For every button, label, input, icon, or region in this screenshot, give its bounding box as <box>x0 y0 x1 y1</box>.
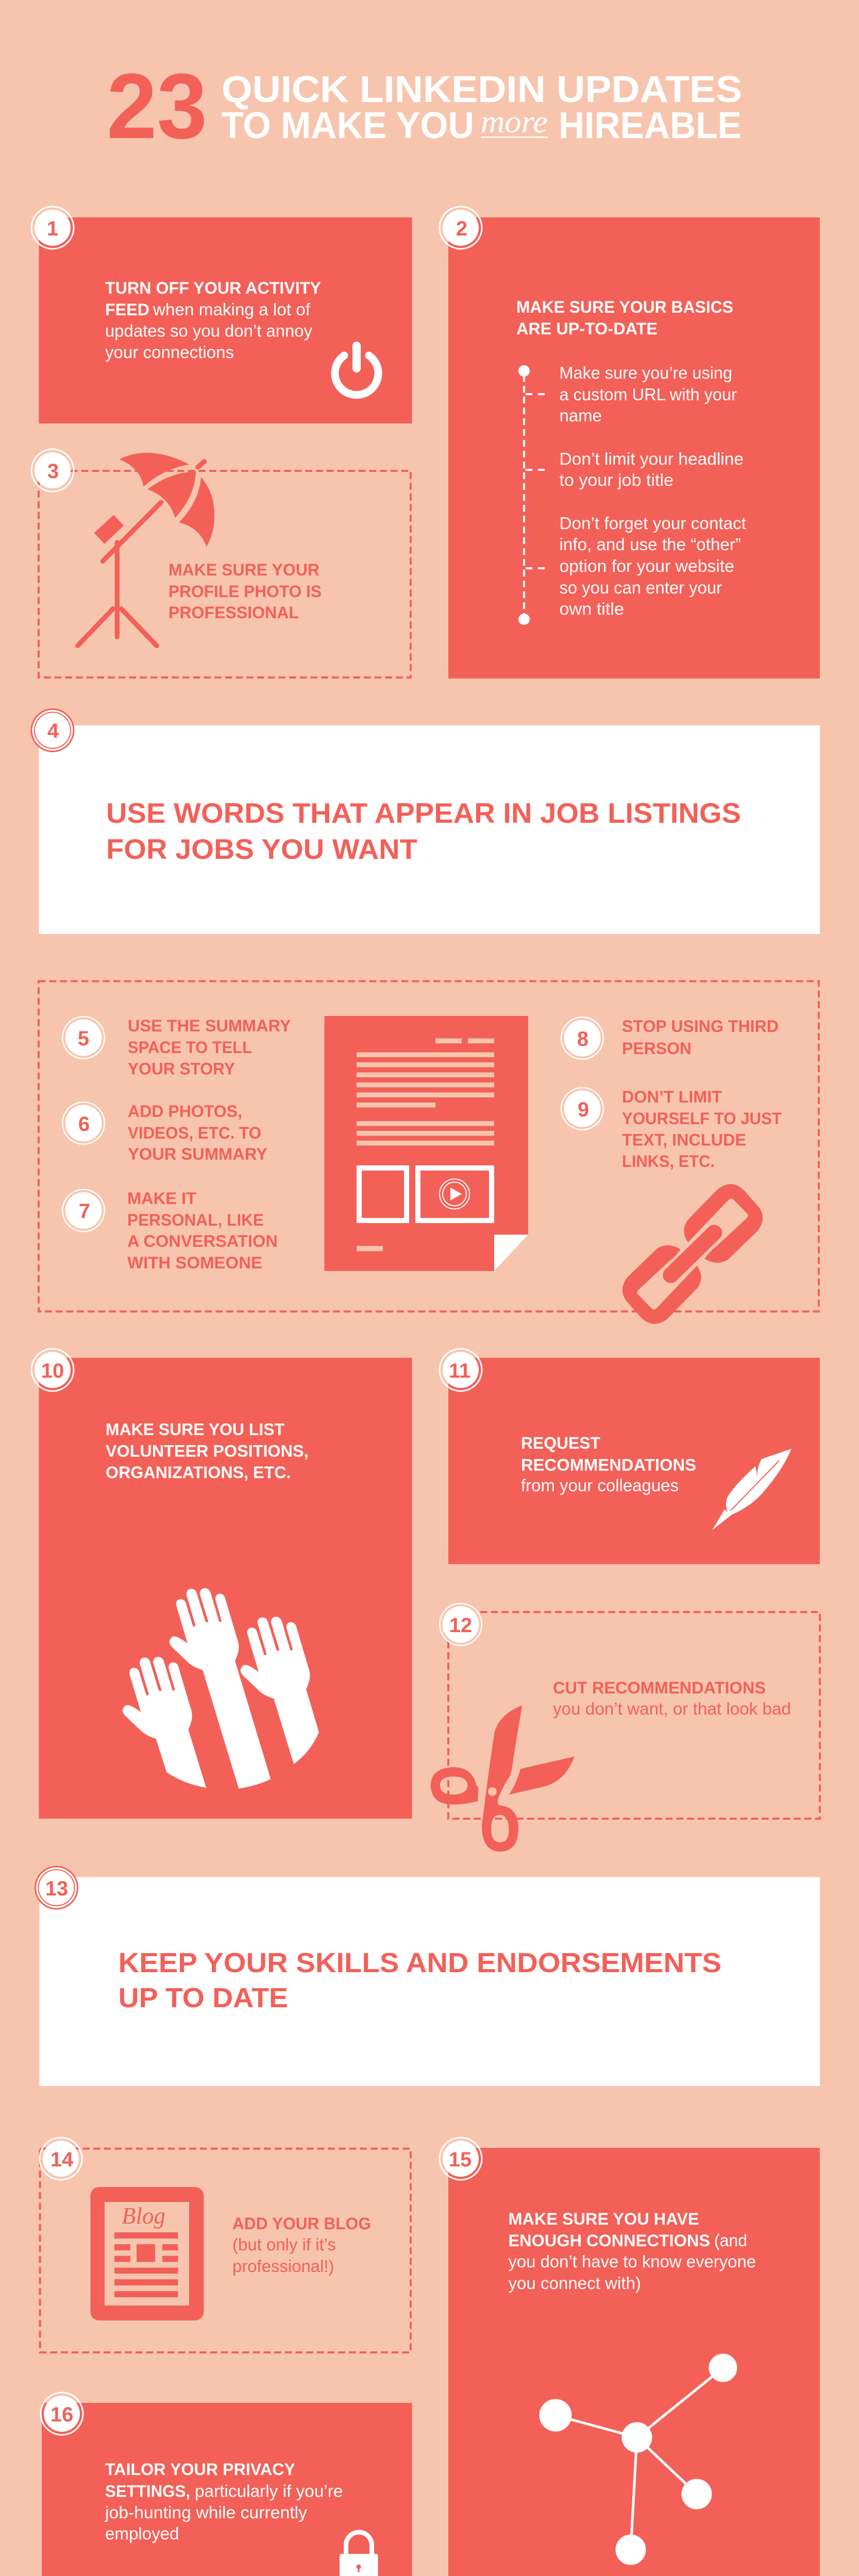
badge 2 <box>440 207 482 249</box>
panel: tip 4 words in job listings <box>39 725 820 934</box>
badge 1 <box>31 207 74 249</box>
tips 5-7 text: VIDEOS, ETC. TO <box>128 1124 261 1142</box>
tip 14 text: ADD YOUR BLOG <box>232 2214 371 2233</box>
title: TO MAKE YOU <box>222 105 474 146</box>
tip 15 text: MAKE SURE YOU HAVE <box>508 2210 699 2228</box>
icon: padlock <box>340 2532 378 2576</box>
tip 16 text: job-hunting while currently <box>105 2503 308 2522</box>
tip 11 text: from your colleagues <box>521 1476 679 1495</box>
tip 1 text: when making a lot of <box>153 300 311 319</box>
tip 2 list: to your job title <box>560 470 673 489</box>
panel: tip 10 volunteer <box>39 1358 412 1819</box>
tip 2 list: Make sure you’re using <box>560 363 732 382</box>
tip 15 text: you don’t have to know everyone <box>508 2252 756 2271</box>
tip 16 text: TAILOR YOUR PRIVACY <box>105 2460 295 2479</box>
badge 11 <box>440 1349 482 1391</box>
badge 5: 5 <box>78 1027 89 1050</box>
tip 10 text: VOLUNTEER POSITIONS, <box>106 1442 308 1461</box>
tip 14 text: professional!) <box>232 2257 334 2276</box>
tip 2 list: a custom URL with your <box>560 385 737 404</box>
tips 5-7 text: A CONVERSATION <box>127 1232 278 1250</box>
tip 3 text: PROFILE PHOTO IS <box>169 582 322 601</box>
tip 16 text: particularly if you’re <box>195 2482 343 2501</box>
badge 7 <box>62 1189 105 1232</box>
badge 5 <box>62 1016 105 1059</box>
icon: document <box>325 1016 528 1271</box>
tip 2 list: Don’t forget your contact <box>560 514 746 533</box>
tip 2 list: info, and use the “other” <box>560 535 741 554</box>
tip 4 text: FOR JOBS YOU WANT <box>106 833 417 865</box>
badge 9: 9 <box>578 1098 589 1121</box>
tip 14 text <box>232 2214 371 2276</box>
tips 8-9 text: STOP USING THIRD <box>622 1017 779 1036</box>
badge 14: 14 <box>50 2148 74 2171</box>
icon: raised hands <box>123 1588 319 1789</box>
tips 8-9 text: YOURSELF TO JUST <box>622 1109 782 1128</box>
tip 16 text <box>105 2460 343 2543</box>
tip 12 text <box>553 1679 791 1718</box>
panel: tip 16 privacy <box>42 2403 412 2576</box>
tip 3 text: MAKE SURE YOUR <box>169 561 319 579</box>
badge 1: 1 <box>47 217 58 240</box>
tip 14 text: (but only if it’s <box>232 2235 336 2254</box>
panel: tip 3 profile photo <box>39 453 411 677</box>
tip 13 text: KEEP YOUR SKILLS AND ENDORSEMENTS <box>119 1947 721 1978</box>
tips 5-7 text: USE THE SUMMARY <box>128 1016 291 1035</box>
tip 10 text: MAKE SURE YOU LIST <box>106 1420 284 1439</box>
tips 8-9 text <box>622 1017 782 1171</box>
tip 2 list: so you can enter your <box>560 578 722 597</box>
tips 8-9 text: PERSON <box>622 1039 692 1058</box>
panel: tip 12 cut recommendations <box>431 1612 820 1852</box>
badge 12: 12 <box>449 1614 472 1637</box>
badge 15 <box>440 2138 482 2180</box>
tips 8-9 text: TEXT, INCLUDE <box>622 1130 746 1149</box>
tip 2 list: name <box>560 406 602 425</box>
tip 12 text: you don’t want, or that look bad <box>553 1699 791 1718</box>
tip 1 text: updates so you don’t annoy <box>105 321 312 340</box>
tip 4 text <box>106 797 741 865</box>
tip 11 text: RECOMMENDATIONS <box>521 1456 696 1475</box>
tip 2 list: own title <box>560 599 624 618</box>
badge 10 <box>31 1349 74 1391</box>
badge 6: 6 <box>78 1113 90 1136</box>
tips 5-7 text: ADD PHOTOS, <box>128 1102 242 1121</box>
tip 13 text: UP TO DATE <box>119 1982 288 2013</box>
title: QUICK LINKEDIN UPDATES <box>222 69 742 110</box>
tip 1 text: FEED <box>105 300 149 319</box>
badge 4 <box>31 709 74 751</box>
panel: tip 13 skills <box>39 1877 820 2086</box>
tip 15 text: ENOUGH CONNECTIONS <box>508 2231 710 2250</box>
tip 2 list: Don’t limit your headline <box>560 449 744 468</box>
badge 13 <box>35 1867 77 1909</box>
tip 1 text: your connections <box>105 343 234 362</box>
badge 16: 16 <box>50 2403 73 2426</box>
tip 2 list: option for your website <box>560 556 734 575</box>
panel: tips 5-9 summary <box>39 981 819 1324</box>
tips 5-7 text: PERSONAL, LIKE <box>127 1211 264 1229</box>
panel: tip 14 blog <box>40 2148 411 2352</box>
tip 2 heading <box>516 298 733 338</box>
title <box>107 55 742 158</box>
badge 6 <box>62 1101 105 1145</box>
title: HIREABLE <box>559 105 742 146</box>
badge 4: 4 <box>47 720 59 742</box>
tip 16 text: SETTINGS, <box>105 2482 190 2501</box>
tip 4 text: USE WORDS THAT APPEAR IN JOB LISTINGS <box>106 797 741 829</box>
badge 3: 3 <box>47 460 59 483</box>
panel: tip 15 connections <box>448 2148 820 2576</box>
tip 2 heading: ARE UP-TO-DATE <box>516 319 658 338</box>
badge 14 <box>40 2138 82 2180</box>
tips 5-7 text: YOUR STORY <box>128 1059 235 1078</box>
tip 16 text: employed <box>105 2524 179 2543</box>
badge 10: 10 <box>41 1360 64 1382</box>
tip 2 heading: MAKE SURE YOUR BASICS <box>516 298 733 316</box>
badge 11: 11 <box>449 1360 470 1382</box>
icon: feather <box>712 1449 791 1530</box>
tips 5-7 text <box>127 1016 291 1272</box>
timeline connector <box>518 365 547 625</box>
icon: blog tablet <box>90 2187 204 2320</box>
tip 12 text: CUT RECOMMENDATIONS <box>553 1679 766 1697</box>
tips 5-7 text: MAKE IT <box>127 1189 196 1208</box>
panel: tip 2 basics <box>448 217 820 679</box>
badge 9 <box>561 1087 604 1130</box>
tip 10 text: ORGANIZATIONS, ETC. <box>106 1463 291 1482</box>
badge 2: 2 <box>456 217 467 240</box>
network diagram <box>541 2355 736 2564</box>
tip 3 text <box>169 561 322 622</box>
tip 1 text <box>105 279 321 362</box>
tip 10 text <box>106 1420 308 1482</box>
tip 13 text <box>119 1947 721 2013</box>
tip 15 text <box>508 2210 756 2293</box>
tip 1 text: TURN OFF YOUR ACTIVITY <box>105 279 321 297</box>
icon: blog tablet: Blog <box>122 2202 165 2229</box>
tips 5-7 text: SPACE TO TELL <box>128 1038 252 1057</box>
badge 13: 13 <box>45 1877 68 1900</box>
tips 5-7 text: WITH SOMEONE <box>127 1253 262 1272</box>
tip 11 text <box>521 1434 696 1495</box>
panel: tip 11 recommendations <box>448 1358 820 1564</box>
icon: power button <box>335 346 378 395</box>
tip 3 text: PROFESSIONAL <box>169 603 299 622</box>
tip 2 list <box>560 363 746 618</box>
tips 8-9 text: LINKS, ETC. <box>622 1152 715 1171</box>
tip 15 text: you connect with) <box>508 2274 641 2293</box>
badge 8 <box>561 1016 604 1060</box>
icon: photo umbrella <box>78 453 214 646</box>
tips 8-9 text: DON’T LIMIT <box>622 1088 722 1106</box>
badge 12 <box>439 1603 482 1646</box>
tips 5-7 text: YOUR SUMMARY <box>128 1145 267 1163</box>
icon: scissors <box>431 1705 575 1852</box>
tip 11 text: REQUEST <box>521 1434 600 1452</box>
icon: chain link <box>622 1184 763 1324</box>
badge 7: 7 <box>79 1200 90 1223</box>
badge 8: 8 <box>577 1028 588 1050</box>
tip 15 text: (and <box>714 2231 747 2250</box>
panel: tip 1 activity feed <box>39 217 412 423</box>
title: 23 <box>107 55 207 158</box>
badge 15: 15 <box>449 2148 471 2171</box>
badge 16 <box>41 2393 83 2435</box>
title: more <box>481 105 548 140</box>
badge 3 <box>31 449 74 492</box>
